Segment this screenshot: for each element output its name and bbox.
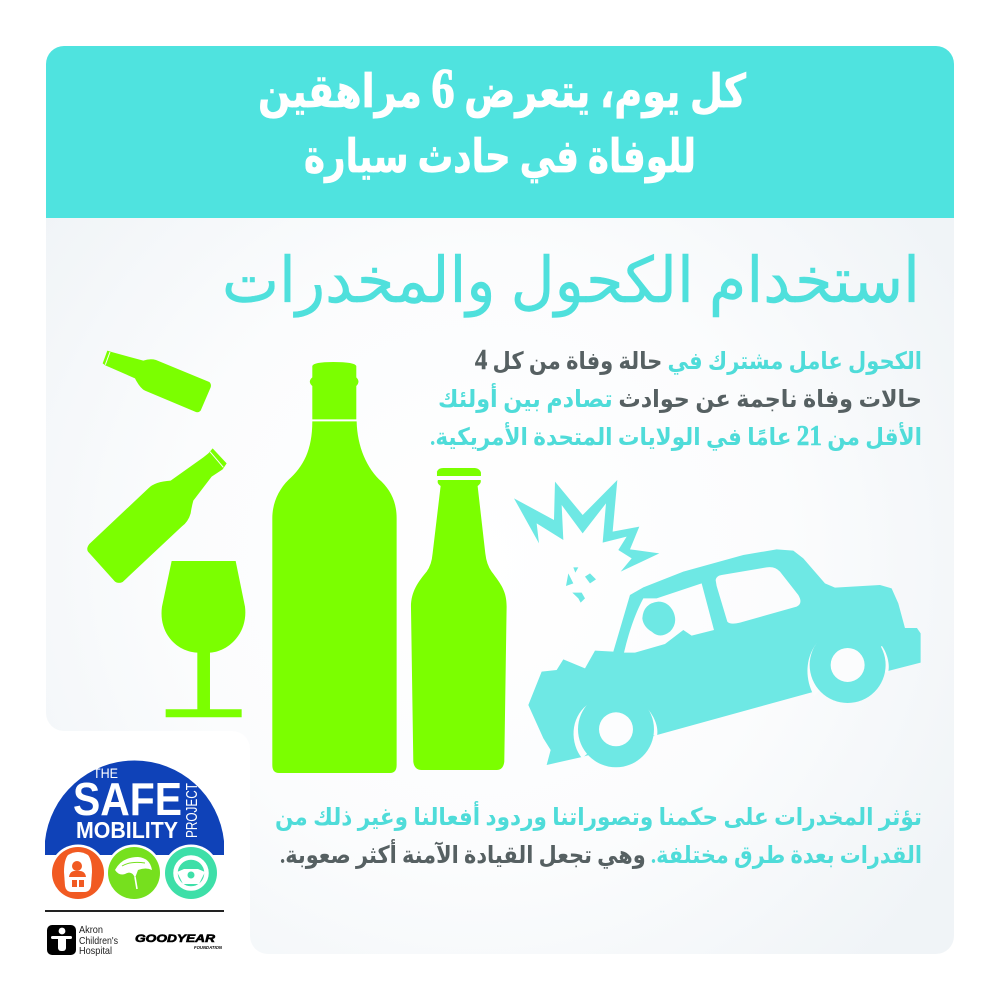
logo dome [45,760,224,855]
icon: tilted beer bottle top [103,351,211,412]
title: استخدام الكحول والمخدرات [222,246,920,318]
icon: crash burst [514,480,659,603]
driver head [642,602,675,635]
logo wordmark: MOBILITY [76,817,178,843]
heading: header text: للوفاة في حادث سيارة [304,131,696,183]
text: Goodyear Foundation: GOODYEAR [135,933,215,945]
icon: beer bottle [411,468,507,770]
text block: alcohol statistic [430,345,922,452]
icon: crashed car [528,549,921,767]
text block: drugs statement [275,801,922,869]
icon: tilted beer bottle middle [87,448,227,583]
text: Goodyear Foundation: FOUNDATION [194,945,223,950]
panel: body background [46,218,954,954]
icon: steering wheel [162,844,220,902]
icon: child seat [50,844,106,902]
text: Akron Children's Hospital: Children's [79,935,118,947]
text: Goodyear Foundation [135,933,223,950]
icon: large wine bottle [272,362,397,773]
text: Akron Children's Hospital: Hospital [79,945,112,957]
text block: alcohol statistic: الأقل من 21 عامًا في الولايات المتحدة الأمريكية. [430,421,922,452]
text block: drugs statement: القدرات بعدة طرق مختلفة. وهي تجعل القيادة الآمنة أكثر صعوبة. [280,839,922,869]
text block: drugs statement: تؤثر المخدرات على حكمنا وتصوراتنا وردود أفعالنا وغير ذلك من [275,801,922,831]
logo: The Safe Mobility Project [45,760,224,957]
text: Akron Children's Hospital: Akron [79,924,103,936]
logo wordmark: PROJECT [184,783,201,838]
icon: bike helmet [106,844,162,902]
logo wordmark [73,765,201,843]
front wheel [574,691,657,767]
logo wordmark: THE [93,765,118,781]
logo rule [45,910,224,912]
text: Akron Children's Hospital [79,924,118,957]
heading: header text [258,58,746,183]
panel: header band [46,46,954,218]
icon: Akron Children's Hospital [47,925,76,955]
logo wordmark: SAFE [73,773,182,825]
icon: wine glass [162,561,245,717]
text block: alcohol statistic: الكحول عامل مشترك في حالة وفاة من كل 4 [475,345,922,376]
rear wheel [807,627,889,703]
heading: header text: كل يوم، يتعرض 6 مراهقين [258,58,746,120]
text block: alcohol statistic: حالات وفاة ناجمة عن حوادث تصادم بين أولئك [438,383,922,413]
